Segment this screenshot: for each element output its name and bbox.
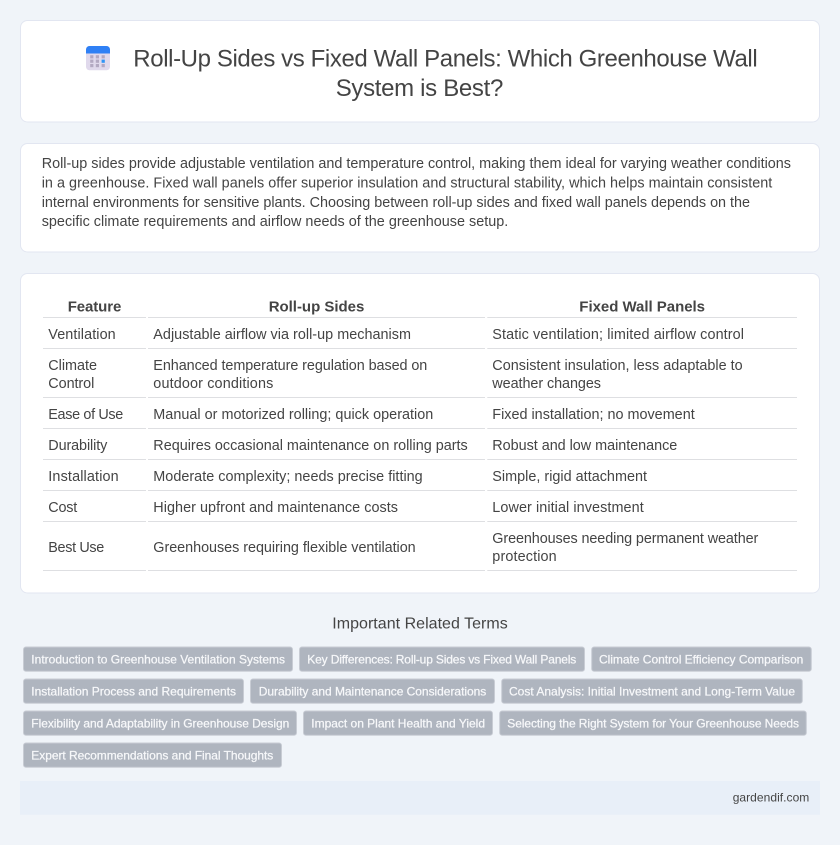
table header row: Feature bbox=[68, 299, 121, 316]
panel: related term tags: Installation Process and Requirements bbox=[31, 684, 236, 698]
row: cost bbox=[43, 500, 797, 522]
icon: calendar bbox=[86, 46, 110, 70]
row: climate control: Control bbox=[48, 376, 94, 392]
row: installation: Installation bbox=[48, 469, 119, 485]
table header row: Fixed Wall Panels bbox=[579, 299, 705, 316]
row: cost: Cost bbox=[48, 500, 77, 516]
panel: introduction text: in a greenhouse. Fixed wall panels offer superior insulation and structural stability, which helps maintain consistent bbox=[42, 175, 772, 191]
row: best use: protection bbox=[492, 549, 557, 565]
panel: related term tags: Key Differences: Roll-up Sides vs Fixed Wall Panels bbox=[307, 652, 576, 666]
row: climate control: outdoor conditions bbox=[153, 376, 273, 392]
row: climate control: Enhanced temperature regulation based on bbox=[153, 358, 427, 374]
panel: related term tags bbox=[24, 647, 811, 767]
row: durability: Requires occasional maintenance on rolling parts bbox=[153, 438, 468, 454]
panel: related term tags: Selecting the Right System for Your Greenhouse Needs bbox=[507, 716, 799, 730]
row: best use: Best Use bbox=[48, 540, 104, 556]
row: best use: Greenhouses requiring flexible ventilation bbox=[153, 540, 416, 556]
row: installation: Simple, rigid attachment bbox=[492, 469, 647, 485]
row: ventilation bbox=[43, 327, 797, 349]
row: durability: Robust and low maintenance bbox=[492, 438, 677, 454]
panel: comparison table bbox=[20, 274, 820, 593]
row: ease of use bbox=[43, 407, 797, 429]
row: ventilation: Static ventilation; limited airflow control bbox=[492, 327, 744, 343]
row: best use bbox=[43, 531, 797, 571]
panel: related term tags: Cost Analysis: Initial Investment and Long-Term Value bbox=[509, 684, 795, 698]
panel: related term tags: Durability and Maintenance Considerations bbox=[259, 684, 486, 698]
row: ease of use: Ease of Use bbox=[48, 407, 123, 423]
table header row: Roll-up Sides bbox=[269, 299, 364, 316]
row: cost: Higher upfront and maintenance costs bbox=[153, 500, 398, 516]
row: ease of use: Fixed installation; no movement bbox=[492, 407, 695, 423]
row: climate control: Consistent insulation, less adaptable to bbox=[492, 358, 743, 374]
row: installation: Moderate complexity; needs precise fitting bbox=[153, 469, 423, 485]
footer bbox=[20, 781, 820, 815]
panel: introduction text bbox=[20, 144, 820, 252]
table header row bbox=[43, 299, 797, 318]
row: installation bbox=[43, 469, 797, 491]
row: climate control bbox=[43, 358, 797, 398]
row: ease of use: Manual or motorized rolling; quick operation bbox=[153, 407, 433, 423]
panel: introduction text: Roll-up sides provide adjustable ventilation and temperature control, making them ideal for varying weather conditions bbox=[42, 156, 791, 172]
row: best use: Greenhouses needing permanent weather bbox=[492, 531, 759, 547]
panel: related term tags: Introduction to Greenhouse Ventilation Systems bbox=[31, 652, 285, 666]
footer: gardendif.com bbox=[733, 791, 809, 805]
title bbox=[133, 46, 758, 102]
heading: important related terms: Important Related Terms bbox=[332, 615, 508, 632]
title: Roll-Up Sides vs Fixed Wall Panels: Which Greenhouse Wall bbox=[133, 46, 758, 73]
row: cost: Lower initial investment bbox=[492, 500, 644, 516]
panel: related term tags: Climate Control Efficiency Comparison bbox=[599, 652, 803, 666]
title: System is Best? bbox=[336, 75, 503, 102]
panel: related term tags: Expert Recommendations and Final Thoughts bbox=[31, 748, 273, 762]
row: ventilation: Adjustable airflow via roll-up mechanism bbox=[153, 327, 411, 343]
panel: introduction text: specific climate requirements and airflow needs of the greenhouse setup. bbox=[42, 214, 508, 230]
panel: header bbox=[20, 20, 820, 122]
panel: related term tags: Flexibility and Adaptability in Greenhouse Design bbox=[31, 716, 289, 730]
row: ventilation: Ventilation bbox=[48, 327, 116, 343]
row: durability: Durability bbox=[48, 438, 108, 454]
panel: related term tags: Impact on Plant Health and Yield bbox=[311, 716, 485, 730]
panel: introduction text: internal environments for sensitive plants. Choosing between roll-up sides and fixed wall panels depends on the bbox=[42, 195, 750, 211]
row: climate control: weather changes bbox=[491, 376, 601, 392]
row: climate control: Climate bbox=[48, 358, 97, 374]
row: durability bbox=[43, 438, 797, 460]
